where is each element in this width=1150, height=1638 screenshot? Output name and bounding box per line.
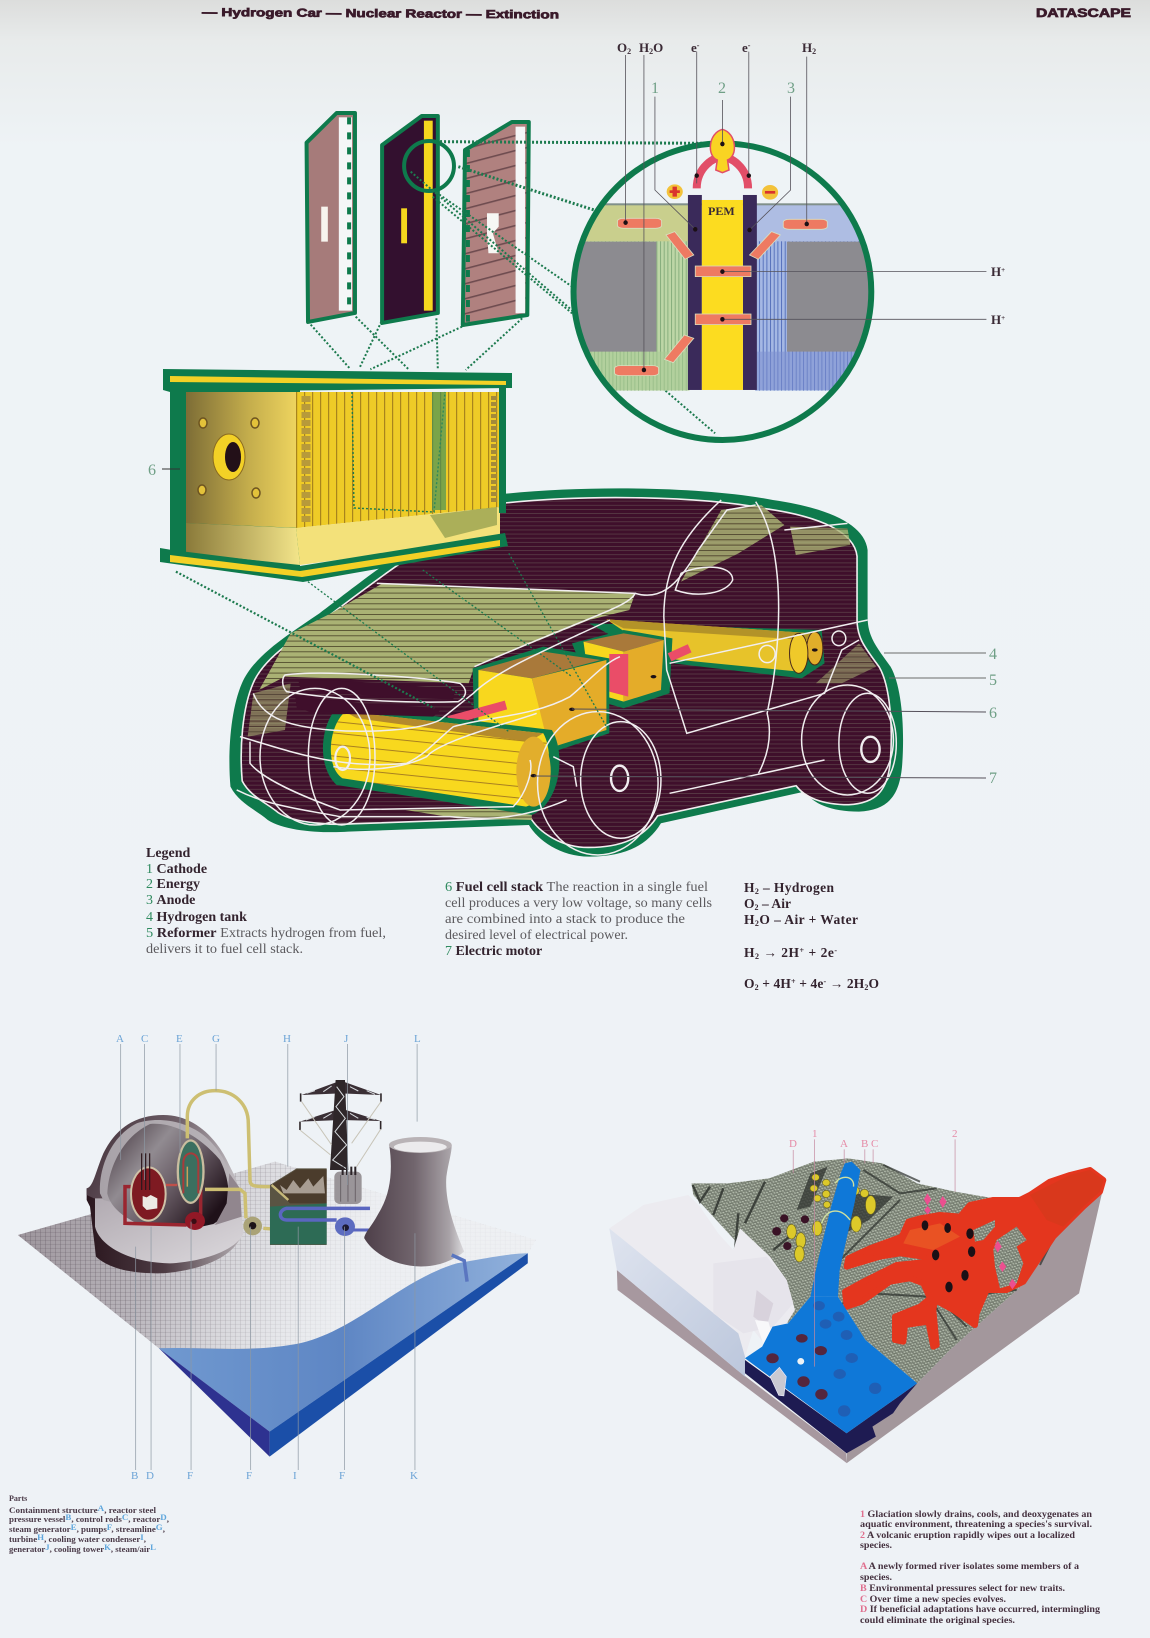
gas and electron labels: 2 (627, 47, 631, 56)
fuel cell labels: - (748, 41, 751, 50)
chemical formulas: H (744, 912, 755, 927)
extinction notes: C Over time a new species evolves. (860, 1594, 1006, 1605)
extinction notes (860, 1509, 1100, 1626)
legend column two: 6 Fuel cell stack The reaction in a single fuel (445, 880, 708, 895)
extinction notes: A A newly formed river isolates some members of a (860, 1561, 1079, 1572)
cooling water pump (335, 1217, 370, 1236)
chemical formulas: + (791, 977, 796, 986)
slab left edge (159, 1348, 270, 1457)
fuel cell labels: 3 (787, 80, 795, 97)
fuel cell labels: 2 (812, 47, 816, 56)
leader lines (626, 52, 986, 370)
reactor letter labels: F (246, 1470, 252, 1482)
reactor letter labels: G (212, 1033, 220, 1045)
plus terminal (667, 184, 683, 199)
stack bolts (198, 418, 260, 498)
reactor parts list: , (163, 1525, 165, 1534)
extinction labels (789, 1128, 958, 1150)
reactor parts list: steam generator (9, 1525, 64, 1534)
reactor letter labels: H (283, 1033, 291, 1045)
extinction labels: D (789, 1138, 797, 1150)
reactor parts list: K (104, 1543, 112, 1552)
side window stripes (681, 505, 784, 582)
species and water (745, 1139, 955, 1453)
reactor letter labels: L (414, 1033, 421, 1045)
lake surface (745, 1297, 917, 1433)
sill stripes (406, 808, 532, 820)
steam line pipes (187, 1091, 277, 1229)
lake circles dark (766, 1334, 828, 1400)
reactor parts list: , streamline (111, 1525, 156, 1534)
chemical formulas: + 2e (805, 945, 834, 960)
header: topics: — Hydrogen Car — Nuclear Reactor — Extinction (202, 7, 559, 21)
legend column one: 1 Cathode (146, 862, 207, 877)
reactor parts list: J (45, 1543, 50, 1552)
rear window stripes (790, 527, 850, 555)
legend column one: delivers it to fuel cell stack. (146, 942, 303, 957)
condensate pump (243, 1217, 262, 1235)
lava drops (922, 1220, 975, 1292)
electron arc (697, 157, 748, 188)
dotted connectors from fuel cell block to car (176, 553, 606, 732)
reactor parts list: , control rods (71, 1515, 122, 1524)
electric motor 7 (323, 705, 559, 815)
reactor letter labels: F (339, 1470, 345, 1482)
white car line work (377, 500, 896, 855)
leader dots (623, 142, 809, 372)
reactor letter labels: J (344, 1033, 349, 1045)
reactor parts list: I (140, 1533, 144, 1542)
hydrogen car illustration with fuel cell stack (229, 488, 903, 857)
tower opening (394, 1142, 447, 1152)
legend column one: 5 Reformer Extracts hydrogen from fuel, (146, 926, 386, 941)
reactor parts list: B (65, 1513, 72, 1522)
ground grid (18, 1162, 536, 1432)
reactor parts list: turbine (9, 1535, 34, 1544)
reactor parts list: A (98, 1504, 104, 1513)
legend column two: cell produces a very low voltage, so many cells (445, 896, 712, 911)
chemical formulas: → 2H (826, 976, 865, 991)
legend column one: Legend (146, 846, 191, 861)
front corner stripes (248, 683, 291, 737)
reactor letter labels: K (410, 1470, 418, 1482)
stack port (213, 434, 245, 480)
glacier snow surface (609, 1195, 795, 1357)
lens interior (565, 195, 880, 391)
chemical formulas: → 2H (760, 945, 800, 960)
fuel cell labels: 1 (651, 80, 659, 97)
chemical formulas: 2 (755, 983, 759, 992)
stack cell chain (302, 396, 310, 522)
extinction notes: 2 A volcanic eruption rapidly wipes out a localized (860, 1530, 1076, 1541)
reactor parts list: , reactor (128, 1515, 161, 1524)
reactor parts list: F (107, 1523, 112, 1532)
extinction labels: B (861, 1138, 868, 1150)
extinction notes: species. (860, 1572, 892, 1583)
reactor letter labels: A (116, 1033, 124, 1045)
dark species dots (772, 1214, 809, 1250)
rear edge stripes (816, 643, 876, 683)
grille lower slot (295, 695, 443, 717)
glacier lower facet (713, 1257, 793, 1333)
stack front face (296, 392, 500, 528)
reactor parts list (9, 1494, 169, 1554)
fuel cell labels: H (639, 40, 649, 55)
legend column two: 7 Electric motor (445, 944, 542, 959)
reactor letter labels: E (176, 1033, 183, 1045)
plate: membrane (382, 116, 438, 323)
extinction labels: 1 (812, 1128, 818, 1140)
header: section name: DATASCAPE (1036, 8, 1131, 20)
chemical formulas: + (800, 946, 805, 955)
plate: cathode (307, 113, 355, 322)
extinction labels: 2 (952, 1128, 958, 1140)
reactor parts list: , (167, 1515, 169, 1524)
dotted connectors (308, 142, 715, 433)
windshield and hood stripes (259, 583, 635, 690)
molecule pills (615, 218, 827, 376)
fuel cell labels: H (802, 40, 812, 55)
chemical formulas: 2 (755, 903, 759, 912)
glacier shadow facet (753, 1290, 773, 1327)
ground slab (18, 1162, 536, 1432)
turbine and condenser (270, 1168, 370, 1245)
plate: anode (463, 122, 529, 325)
fuel cell labels: O (653, 40, 663, 55)
legend column one (146, 846, 386, 957)
extinction leader lines (793, 1139, 955, 1367)
fuel cell labels: 2 (649, 47, 653, 56)
chemical formulas: + 4H (759, 976, 791, 991)
tower body (364, 1145, 464, 1266)
slab right edge (270, 1253, 528, 1457)
extinction labels: C (871, 1138, 878, 1150)
car body outline (229, 488, 903, 857)
car body fill (241, 498, 891, 847)
right cliff face (847, 1188, 1103, 1463)
ice block face (609, 1228, 745, 1377)
legend column one: 3 Anode (146, 893, 195, 908)
dark ridge rocks (693, 1182, 793, 1250)
lens ring (574, 143, 871, 440)
hydrogen tanks 4 (589, 619, 825, 678)
reactor letter labels: F (187, 1470, 193, 1482)
chemical formulas: O (744, 976, 755, 991)
glacier (609, 1182, 795, 1357)
reactor parts list: D (160, 1513, 167, 1522)
extinction notes: B Environmental pressures select for new traits. (860, 1583, 1065, 1594)
reactor letter labels (116, 1033, 421, 1482)
extinction labels: A (840, 1138, 848, 1150)
front water edge (745, 1360, 917, 1453)
outflow pipe (452, 1255, 467, 1282)
reactor vessel (131, 1153, 177, 1221)
fuel cell stack box 6 (449, 647, 609, 753)
reactor parts list: generator (9, 1545, 42, 1554)
river crossings (821, 1177, 854, 1223)
stack left face (170, 388, 300, 570)
reactor letter labels: C (141, 1033, 148, 1045)
gas and electron labels: O (617, 40, 627, 55)
car part callouts 4 to 7 (534, 646, 997, 787)
legend column two: are combined into a stack to produce the (445, 912, 685, 927)
chemical formulas: – Hydrogen (759, 880, 834, 895)
ice pillar (755, 1320, 775, 1348)
steam generator (177, 1139, 205, 1204)
extinction notes: could eliminate the original species. (860, 1615, 1015, 1626)
chemical formulas: - (823, 977, 826, 986)
extinction notes: D If beneficial adaptations have occurred, intermingling (860, 1604, 1100, 1615)
stack dotted single-cell outline (352, 392, 445, 512)
chemical formulas: + 4e (796, 976, 823, 991)
stack top bar (163, 369, 512, 392)
tower rim (389, 1137, 452, 1153)
legend column two (445, 880, 712, 959)
chemical formulas: - (834, 946, 837, 955)
red primary loop (125, 1173, 201, 1225)
chemical formulas: 2 (864, 983, 868, 992)
chemical formulas: 2 (755, 887, 759, 896)
car part callouts 4 to 7: 7 (989, 770, 997, 787)
chemical formulas: 2 (755, 952, 759, 961)
extinction notes: aquatic environment, threatening a species's survival. (860, 1519, 1092, 1530)
grille upper slot (298, 680, 455, 699)
reactor parts list: , cooling water condenser (44, 1535, 141, 1544)
car front end detail (237, 620, 620, 825)
ice floe (770, 1367, 786, 1396)
reactor parts list: G (156, 1523, 163, 1532)
stack bottom bar (160, 533, 508, 582)
reactor letter labels: D (146, 1470, 154, 1482)
containment base (87, 1188, 242, 1273)
containment interior (107, 1124, 229, 1227)
dark folds behind river (797, 1167, 893, 1233)
chemical formulas: O – Air + Water (759, 912, 858, 927)
reactor letter labels: B (131, 1470, 138, 1482)
chemical formulas: H (744, 945, 755, 960)
fuel cell labels: - (697, 41, 700, 50)
fuel cell diagram group (307, 52, 986, 440)
fuel cell labels (148, 40, 1005, 479)
reactor parts list: E (71, 1523, 77, 1532)
chemical formulas: O (744, 896, 755, 911)
reactor parts list: , (144, 1535, 146, 1544)
yellow species trees (787, 1174, 876, 1262)
white dot (797, 1358, 804, 1365)
rock band (617, 1270, 847, 1463)
mountain terrain (692, 1158, 1103, 1383)
lake circles blue (813, 1301, 881, 1417)
reactor plant (87, 1080, 381, 1273)
orange lava glow (903, 1223, 960, 1250)
lava flow (845, 1170, 1103, 1347)
reactor letter labels: I (293, 1470, 297, 1482)
reactor parts list: pressure vessel (9, 1515, 60, 1524)
generator transformer (334, 1167, 362, 1204)
outer wall right (215, 1173, 242, 1225)
river (810, 1162, 860, 1297)
magnifier circle on plate (404, 141, 454, 191)
reactor parts list: H (37, 1533, 45, 1542)
reactor parts list: , steam/air (111, 1545, 151, 1554)
terrain islands in lava (973, 1220, 1027, 1288)
car part callouts 4 to 7: 4 (989, 646, 997, 663)
reactor parts list: L (150, 1543, 156, 1552)
lava folds at ridge (1030, 1170, 1103, 1227)
extinction terrain block (609, 1158, 1103, 1463)
lava field and right slope (837, 1165, 1103, 1347)
grille and wheel outlines (237, 620, 620, 825)
chemical formulas: H (744, 880, 755, 895)
minus terminal (762, 185, 778, 200)
fuel cell labels: 6 (148, 462, 156, 479)
cooling tower and pipe (121, 1044, 467, 1470)
extinction notes: 1 Glaciation slowly drains, cools, and deoxygenates an (860, 1509, 1093, 1520)
fuel cell labels: + (1001, 266, 1005, 274)
legend column two: desired level of electrical power. (445, 928, 628, 943)
dark terrain streaks (837, 1165, 1053, 1340)
reactor leader lines (121, 1044, 417, 1470)
nuclear site base (18, 1162, 536, 1457)
transmission pylon (300, 1080, 381, 1170)
reactor parts list: , reactor steel (104, 1506, 157, 1515)
containment shell (87, 1115, 242, 1225)
chemical formulas: 2 (755, 919, 759, 928)
fuel cell stack block (160, 369, 512, 582)
pink species markers (924, 1193, 1016, 1289)
energy bulb (710, 129, 734, 173)
fuel cell labels: PEM (708, 204, 735, 218)
legend column one: 2 Energy (146, 877, 200, 892)
fuel cell labels: + (1001, 314, 1005, 322)
car part callouts 4 to 7: 5 (989, 672, 997, 689)
chemical formulas: – Air (759, 896, 791, 911)
legend column one: 4 Hydrogen tank (146, 910, 247, 925)
reactor parts list: C (122, 1513, 129, 1522)
reactor parts list: Parts (9, 1494, 27, 1503)
chemical formulas: O (868, 976, 879, 991)
car part callouts 4 to 7: 6 (989, 705, 997, 722)
fuel cell labels: e (742, 40, 748, 55)
containment floor (95, 1193, 243, 1263)
fuel cell labels: H (991, 312, 1001, 327)
reactor coolant pump (185, 1212, 205, 1230)
reformer box 5 (572, 630, 690, 708)
chemical formulas (744, 880, 879, 992)
sea surface (159, 1253, 528, 1432)
reactor parts list: , cooling tower (50, 1545, 105, 1554)
ground fade (18, 1162, 536, 1432)
reactor parts list: , pumps (77, 1525, 107, 1534)
fuel cell labels: 2 (718, 80, 726, 97)
extinction notes: species. (860, 1540, 892, 1551)
reactor parts list: Containment structure (9, 1506, 87, 1515)
shell inner band (100, 1120, 233, 1220)
fuel cell labels: H (991, 264, 1001, 279)
fuel cell labels: e (691, 40, 697, 55)
